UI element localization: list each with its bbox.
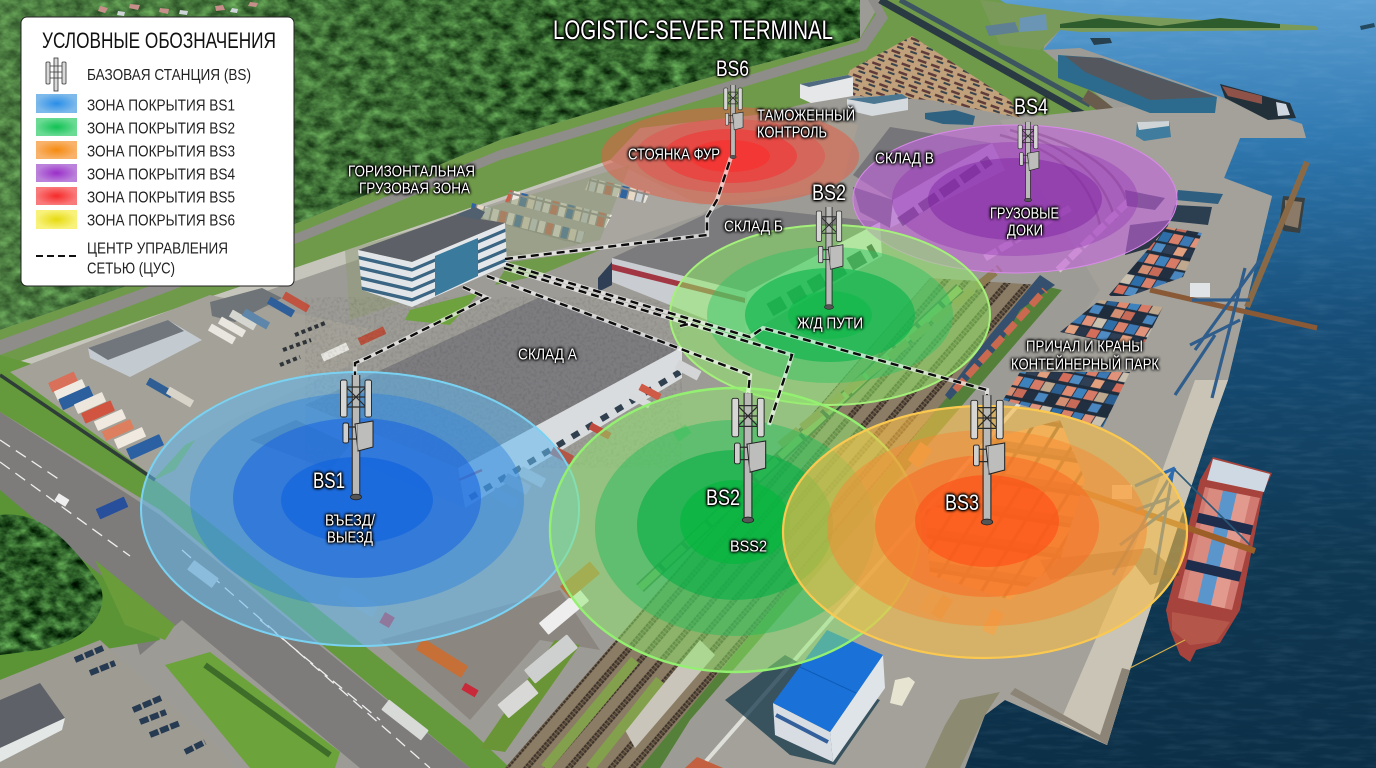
tower BS1 xyxy=(340,375,373,500)
quay and yard concrete xyxy=(700,97,1306,768)
label: control: КОНТРОЛЬ xyxy=(757,124,827,142)
swatch BS3 xyxy=(36,141,77,159)
label: truck parking: СТОЯНКА ФУР xyxy=(628,146,720,164)
central concrete xyxy=(380,590,600,720)
legend text: base station: БАЗОВАЯ СТАНЦИЯ (BS) xyxy=(87,67,251,84)
small ships xyxy=(1220,84,1296,120)
legend text BS1: ЗОНА ПОКРЫТИЯ BS1 xyxy=(87,98,235,114)
coverage zone BS6 xyxy=(601,107,859,205)
parking north: truck lot xyxy=(468,160,770,262)
label warehouse A: СКЛАД А xyxy=(518,346,578,364)
west grass xyxy=(0,355,510,768)
rail yard xyxy=(505,278,1040,768)
coverage zone BS2 north xyxy=(670,225,990,405)
tower BS2 south xyxy=(732,393,766,523)
label container park: КОНТЕЙНЕРНЫЙ ПАРК xyxy=(1011,356,1159,374)
swatch BS2 xyxy=(36,118,77,136)
legend icon: base station xyxy=(46,58,66,91)
label BSS2: BSS2 xyxy=(730,538,767,556)
dock trailers warehouse A xyxy=(491,359,702,509)
swatch BS5 xyxy=(36,187,77,205)
label BS6: BS6 xyxy=(716,56,749,81)
gantry cranes xyxy=(1040,162,1317,585)
office building xyxy=(358,207,507,325)
label BS3: BS3 xyxy=(945,490,979,515)
label berth and cranes: ПРИЧАЛ И КРАНЫ xyxy=(1026,338,1143,356)
coverage zone BS2 south xyxy=(550,388,920,672)
legend text BS6: ЗОНА ПОКРЫТИЯ BS6 xyxy=(87,212,235,230)
legend text NOC line 2: СЕТЬЮ (ЦУС) xyxy=(87,260,175,278)
tower BS4 xyxy=(1018,122,1039,202)
legend panel xyxy=(21,17,294,286)
label entry: ВЪЕЗД/ xyxy=(325,512,376,530)
east container stacks xyxy=(1003,372,1130,427)
north-east land, sand lot and railway xyxy=(840,36,1020,118)
forest xyxy=(0,0,862,332)
north-west truck park and shed xyxy=(10,295,385,478)
network cables to NOC xyxy=(355,157,987,425)
north grass and highway xyxy=(0,0,1140,385)
lower ship xyxy=(1130,457,1272,668)
swatch BS1 xyxy=(36,94,77,113)
water xyxy=(965,0,1376,768)
label warehouse B: СКЛАД Б xyxy=(724,218,783,236)
label rail tracks: Ж/Д ПУТИ xyxy=(797,316,863,332)
label cargo: ГРУЗОВЫЕ xyxy=(990,206,1059,222)
swatch BS4 xyxy=(36,164,77,182)
coverage zone BS4 xyxy=(853,125,1177,273)
label: customs: ТАМОЖЕННЫЙ xyxy=(757,106,855,124)
label warehouse V: СКЛАД В xyxy=(875,150,934,168)
legend text BS5: ЗОНА ПОКРЫТИЯ BS5 xyxy=(87,190,235,206)
tower BS3 xyxy=(971,395,1005,525)
title: LOGISTIC-SEVER TERMINAL xyxy=(553,15,833,45)
legend heading: УСЛОВНЫЕ ОБОЗНАЧЕНИЯ xyxy=(42,28,276,53)
legend text BS2: ЗОНА ПОКРЫТИЯ BS2 xyxy=(87,120,235,138)
label BS4: BS4 xyxy=(1014,94,1048,119)
blue building xyxy=(725,630,885,765)
warehouse V xyxy=(853,127,1170,270)
main road xyxy=(0,412,470,768)
legend text BS3: ЗОНА ПОКРЫТИЯ BS3 xyxy=(87,144,235,160)
map labels xyxy=(313,15,1159,556)
coverage zone BS3 xyxy=(783,406,1187,658)
label: cargo zone line 2: ГРУЗОВАЯ ЗОНА xyxy=(359,180,471,198)
coverage zone BS1 xyxy=(141,372,579,646)
legend text NOC line 1: ЦЕНТР УПРАВЛЕНИЯ xyxy=(87,240,228,258)
label BS1: BS1 xyxy=(313,468,345,493)
tower BS2 north xyxy=(816,207,843,309)
north-east warehouse xyxy=(1058,55,1217,113)
legend text BS4: ЗОНА ПОКРЫТИЯ BS4 xyxy=(87,166,235,184)
label BS2 north: BS2 xyxy=(812,180,846,205)
label: horizontal cargo zone: ГОРИЗОНТАЛЬНАЯ xyxy=(348,164,475,180)
swatch BS6 xyxy=(36,210,77,229)
label exit: ВЫЕЗД xyxy=(327,530,373,546)
label docks: ДОКИ xyxy=(1007,222,1043,240)
tower BS6 xyxy=(724,85,743,159)
warehouse B xyxy=(598,205,882,335)
label BS2 south: BS2 xyxy=(706,485,740,510)
legend dashed line xyxy=(36,255,77,257)
warehouse A xyxy=(250,297,682,508)
dock apron trailers xyxy=(337,561,600,718)
